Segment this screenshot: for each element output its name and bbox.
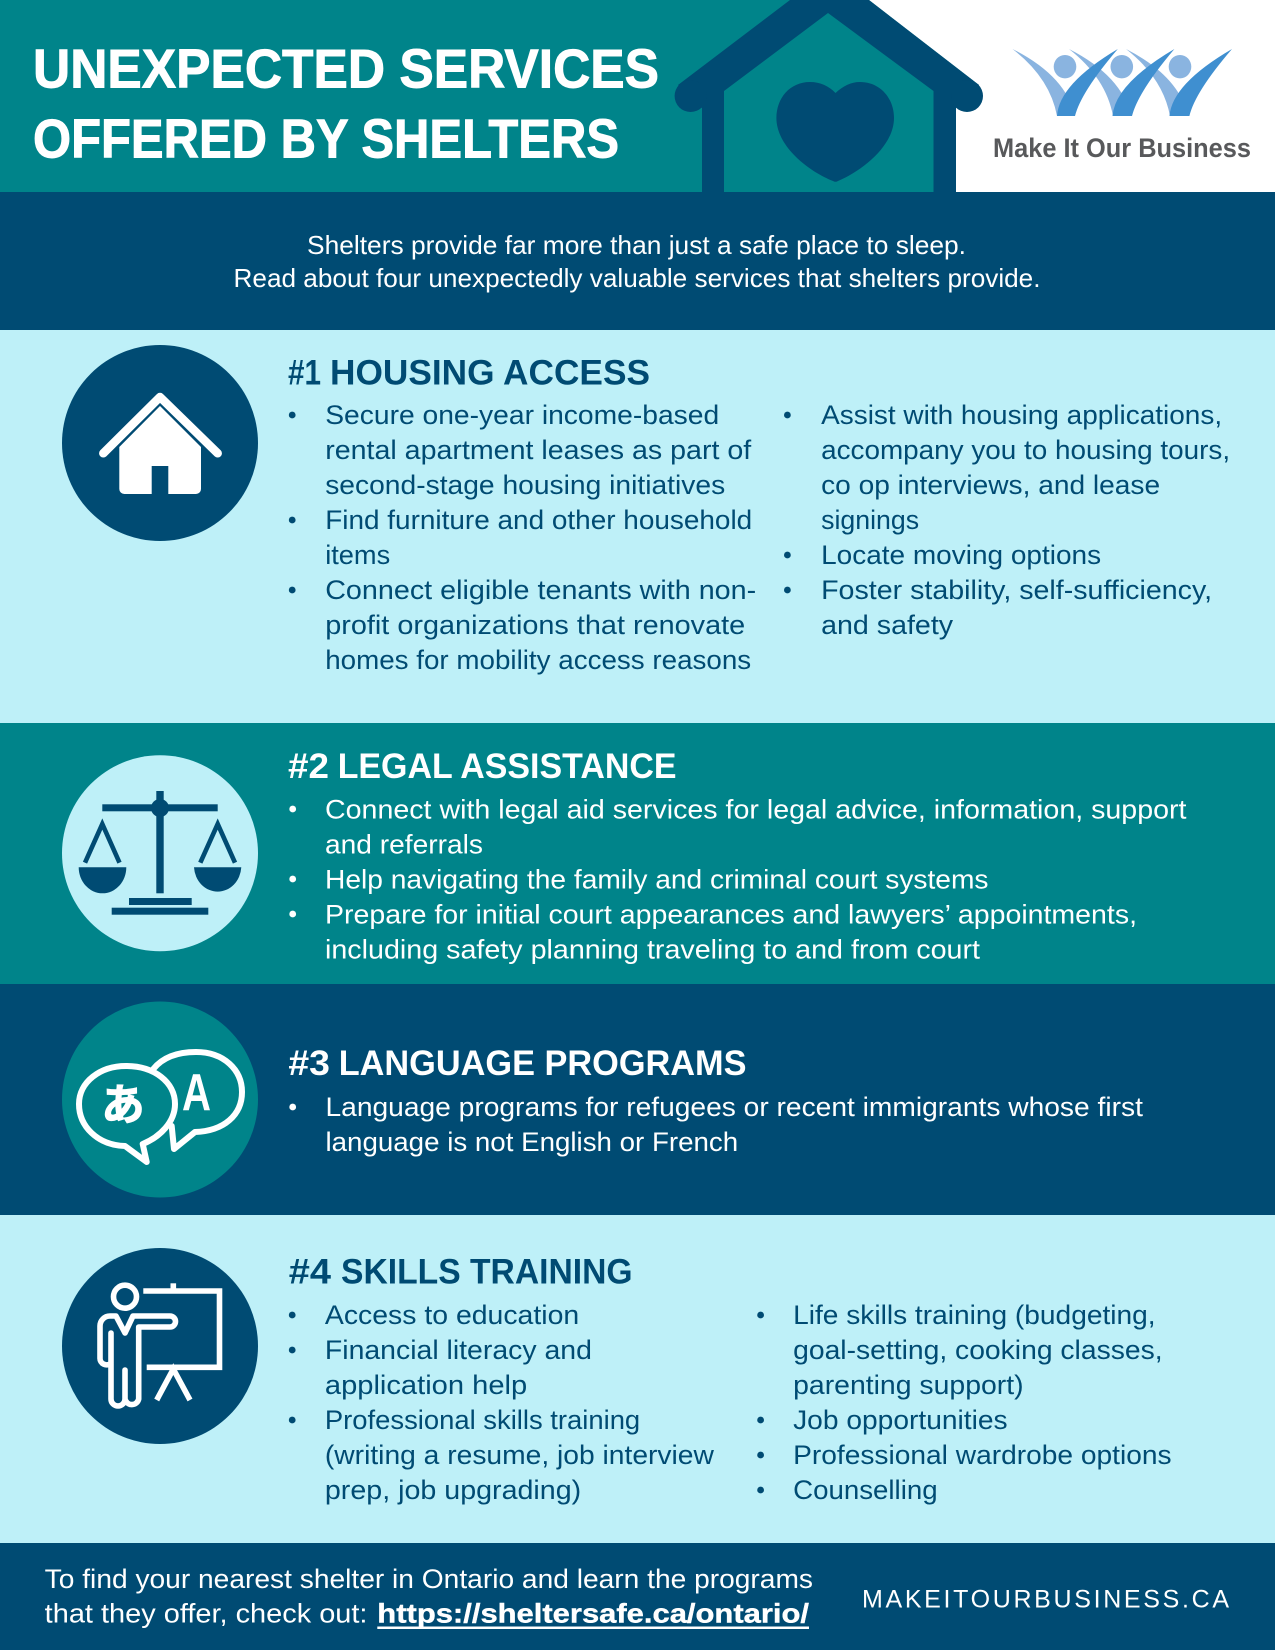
bullets: skills left column: application help (325, 1370, 527, 1400)
bullets: legal assistance: Prepare for initial court appearances and lawyers’ appointments, (325, 900, 1137, 930)
bullets: skills right column: goal-setting, cooking classes, (793, 1335, 1163, 1365)
bullets: skills left column: prep, job upgrading) (325, 1475, 581, 1505)
icon: presenter at board (62, 1248, 258, 1444)
title: UNEXPECTED SERVICES (33, 38, 659, 100)
bullets: skills right column: Professional wardrobe options (793, 1440, 1172, 1470)
title (33, 38, 659, 170)
bullets: housing right column: Locate moving options (821, 540, 1101, 570)
bullets: legal assistance (289, 794, 1187, 964)
icon: speech bubbles: あ (102, 1082, 144, 1130)
heading: legal assistance: LEGAL ASSISTANCE (338, 747, 676, 786)
bullets: skills right column: Job opportunities (793, 1405, 1008, 1435)
bullets: skills left column: Professional skills training (325, 1405, 640, 1435)
intro text: Read about four unexpectedly valuable services that shelters provide. (234, 263, 1040, 293)
bullets: legal assistance: Connect with legal aid services for legal advice, information, support (325, 794, 1187, 824)
bullets: housing right column: accompany you to housing tours, (821, 435, 1230, 465)
bullets: skills left column (289, 1300, 714, 1505)
panel: housing access (0, 330, 1275, 723)
bullets: legal assistance: and referrals (325, 830, 483, 860)
logo: Make It Our Business (993, 49, 1251, 163)
footer call to action: To find your nearest shelter in Ontario and learn the programs (45, 1564, 813, 1594)
icon: scales of justice (62, 755, 258, 951)
bullets: housing left column: second-stage housing initiatives (325, 470, 725, 500)
icon: house with heart (675, 0, 983, 192)
heading: housing access: #1 (288, 354, 321, 392)
icon: speech bubbles: A (182, 1064, 211, 1122)
bullets: skills right column: Life skills training (budgeting, (793, 1300, 1156, 1330)
panel: skills training (0, 1215, 1275, 1543)
icon: house (62, 345, 258, 541)
footer website: MAKEITOURBUSINESS.CA (862, 1586, 1229, 1614)
bullets: housing right column: and safety (821, 610, 954, 640)
bullets: housing left column: homes for mobility access reasons (325, 645, 751, 675)
heading: language programs: LANGUAGE PROGRAMS (339, 1044, 746, 1083)
bullets: language programs: language is not English or French (325, 1127, 738, 1157)
heading: legal assistance: #2 (288, 747, 329, 786)
intro text (234, 230, 1040, 293)
bullets: language programs: Language programs for refugees or recent immigrants whose first (325, 1092, 1143, 1122)
bullets: housing left column: Secure one-year income-based (325, 400, 719, 430)
title: OFFERED BY SHELTERS (33, 108, 619, 170)
bullets: housing right column: Assist with housing applications, (821, 400, 1222, 430)
logo: Make It Our Business: Make It Our Business (993, 133, 1251, 163)
bullets: housing right column: co op interviews, and lease (821, 470, 1160, 500)
heading: housing access: HOUSING ACCESS (330, 354, 650, 392)
heading: skills training: SKILLS TRAINING (341, 1252, 633, 1292)
panel: header (0, 0, 1275, 192)
intro text: Shelters provide far more than just a safe place to sleep. (307, 230, 966, 260)
panel: introduction (0, 192, 1275, 330)
bullets: skills left column: (writing a resume, job interview (325, 1440, 714, 1470)
bullets: legal assistance: Help navigating the family and criminal court systems (325, 864, 988, 894)
footer call to action (45, 1564, 813, 1629)
bullets: legal assistance: including safety planning traveling to and from court (325, 934, 981, 964)
bullets: language programs (289, 1092, 1143, 1157)
bullets: housing left column: Connect eligible tenants with non- (325, 575, 756, 605)
panel: language programs (0, 984, 1275, 1215)
bullets: skills left column: Financial literacy and (325, 1335, 592, 1365)
bullets: skills right column: parenting support) (793, 1370, 1024, 1400)
bullets: housing left column (289, 400, 756, 675)
bullets: housing right column: signings (821, 505, 919, 535)
heading: language programs: #3 (288, 1044, 330, 1083)
bullets: housing left column: profit organizations that renovate (325, 610, 745, 640)
bullets: skills right column (757, 1300, 1172, 1505)
icon: speech bubbles (62, 1002, 258, 1198)
bullets: skills left column: Access to education (325, 1300, 579, 1330)
footer call to action: that they offer, check out: (45, 1599, 367, 1629)
bullets: housing left column: items (325, 540, 390, 570)
footer call to action: https://sheltersafe.ca/ontario/ (377, 1599, 810, 1629)
bullets: housing left column: Find furniture and other household (325, 505, 752, 535)
panel: legal assistance (0, 723, 1275, 984)
bullets: housing right column (784, 400, 1230, 640)
bullets: skills right column: Counselling (793, 1475, 938, 1505)
bullets: housing left column: rental apartment leases as part of (325, 435, 752, 465)
heading: skills training: #4 (289, 1252, 332, 1292)
panel: footer (0, 1543, 1275, 1650)
bullets: housing right column: Foster stability, self-sufficiency, (821, 575, 1212, 605)
